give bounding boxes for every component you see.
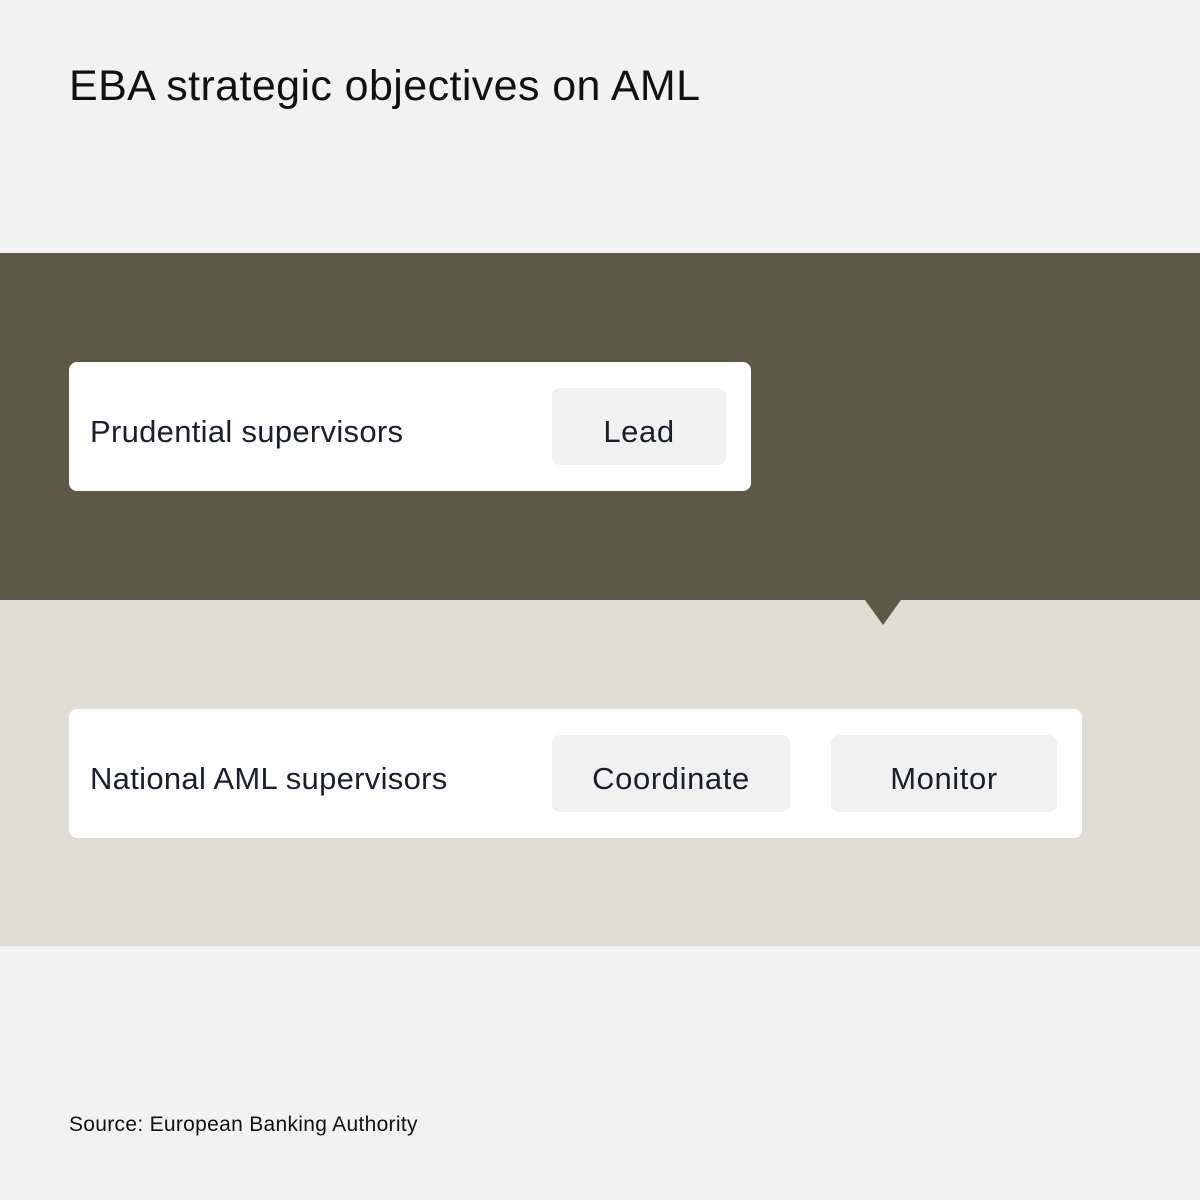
arrow: pointer xyxy=(865,600,901,625)
pill: lead: Lead xyxy=(603,414,675,449)
pill: lead xyxy=(552,388,726,465)
panel: national band xyxy=(0,600,1200,946)
pill: coordinate xyxy=(552,735,790,812)
text: prudential label: Prudential supervisors xyxy=(90,414,403,449)
pill: coordinate: Coordinate xyxy=(592,761,750,796)
card: national AML supervisors xyxy=(69,709,1082,838)
source note: Source: European Banking Authority xyxy=(69,1113,418,1136)
text: national label: National AML supervisors xyxy=(90,761,448,796)
title: EBA strategic objectives on AML xyxy=(69,62,700,110)
pill: monitor: Monitor xyxy=(890,761,998,796)
card: prudential supervisors xyxy=(69,362,751,491)
panel: prudential band xyxy=(0,253,1200,600)
pill: monitor xyxy=(831,735,1057,812)
